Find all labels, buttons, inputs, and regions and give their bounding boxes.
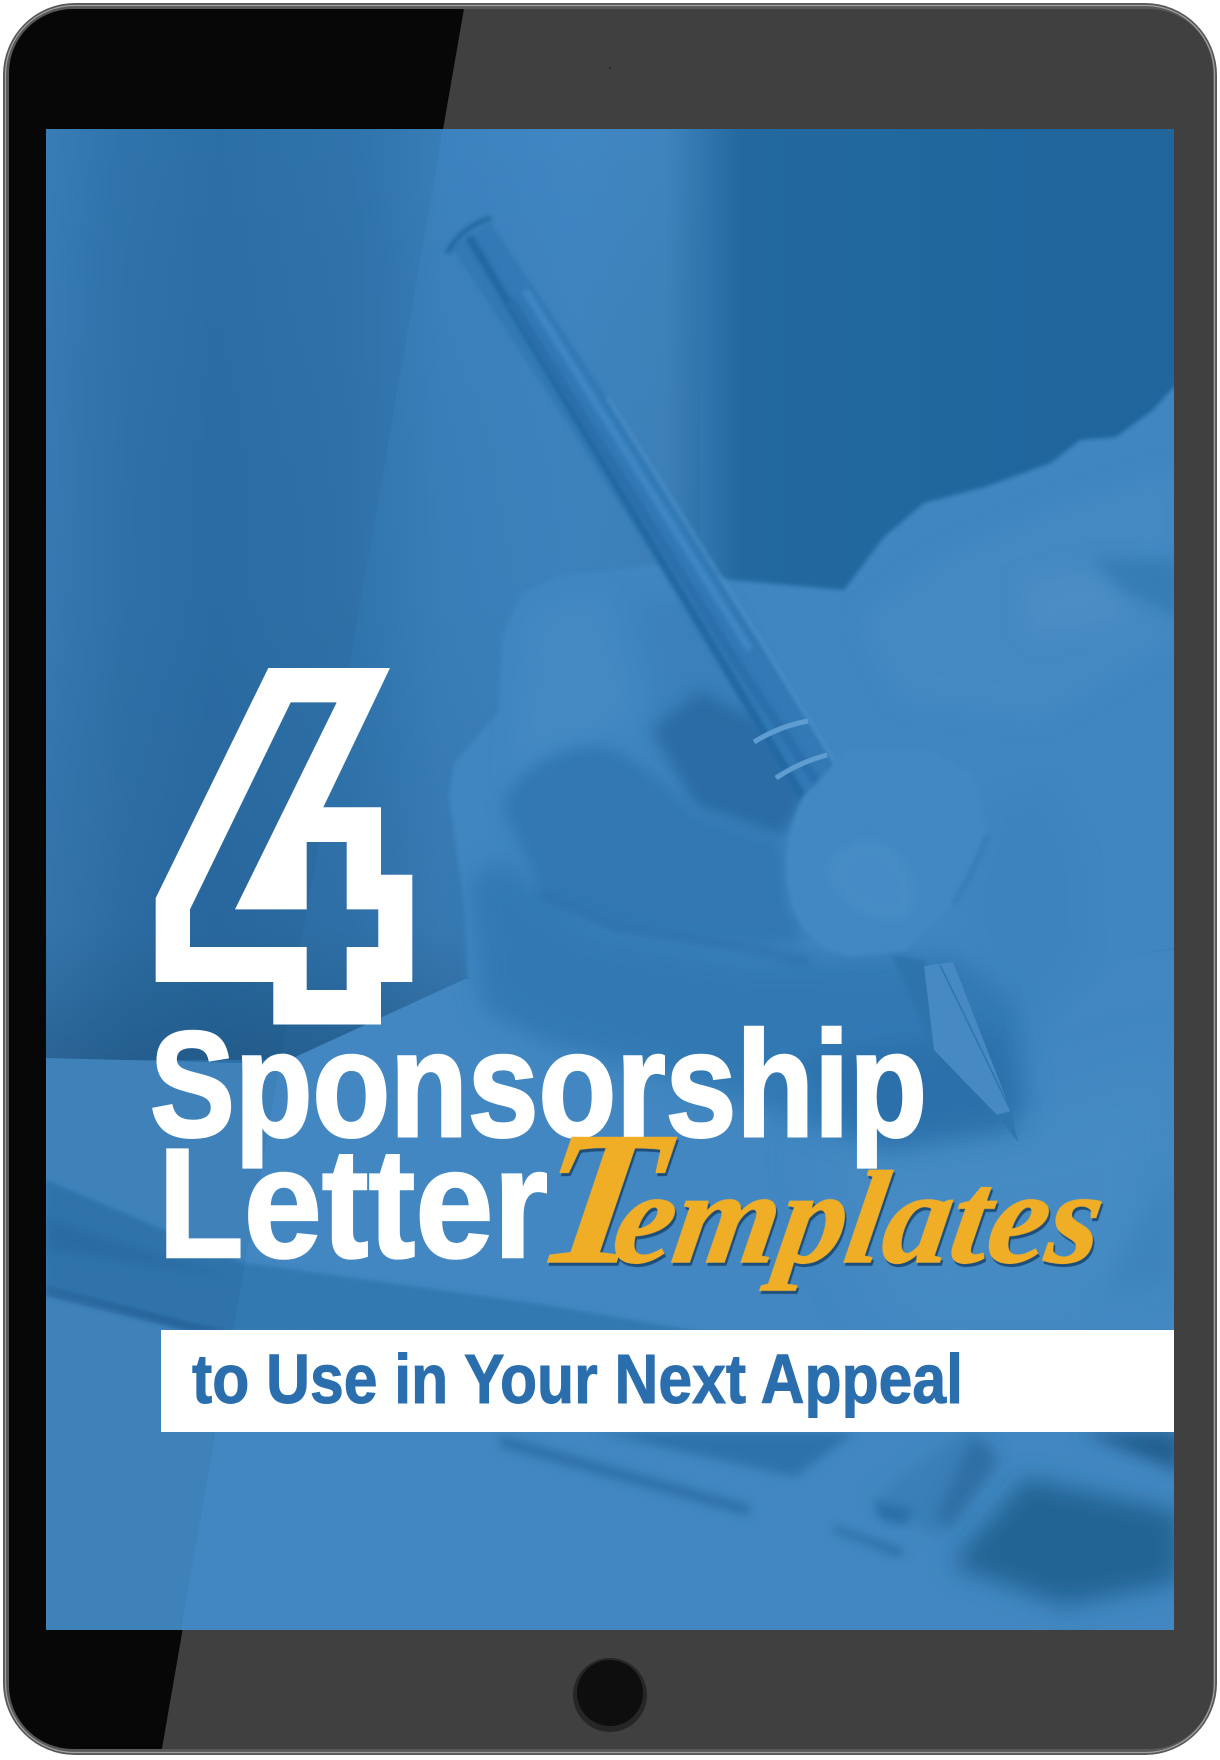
palm in shadow (470, 860, 1030, 1140)
heading: Sponsorship: Sponsorship (150, 1000, 927, 1168)
subtitle banner (161, 1330, 1174, 1432)
heading: Templates script: Templates (525, 1093, 1122, 1303)
pen nib (892, 955, 1018, 1142)
home button (573, 1658, 647, 1732)
paper shadow bands (46, 1180, 1180, 1605)
thumb knuckle crease (956, 840, 984, 900)
camera dot (609, 67, 611, 69)
finger crease (550, 898, 805, 962)
thumb (789, 766, 878, 952)
paper (46, 950, 1174, 1630)
dark gap behind pen (650, 690, 808, 839)
index finger (502, 747, 808, 945)
pen rings (754, 721, 827, 778)
screen glare edge (46, 129, 443, 1630)
thumbnail (825, 841, 915, 921)
palm shadow under pen (842, 1044, 1018, 1152)
heading: Letter: Letter (158, 1117, 548, 1291)
hand (450, 384, 1174, 982)
number 4 (156, 668, 412, 1024)
subtitle banner: to Use in Your Next Appeal (192, 1340, 963, 1418)
pen barrel (447, 218, 838, 800)
screen photo: hand writing with pen (46, 129, 1180, 1630)
